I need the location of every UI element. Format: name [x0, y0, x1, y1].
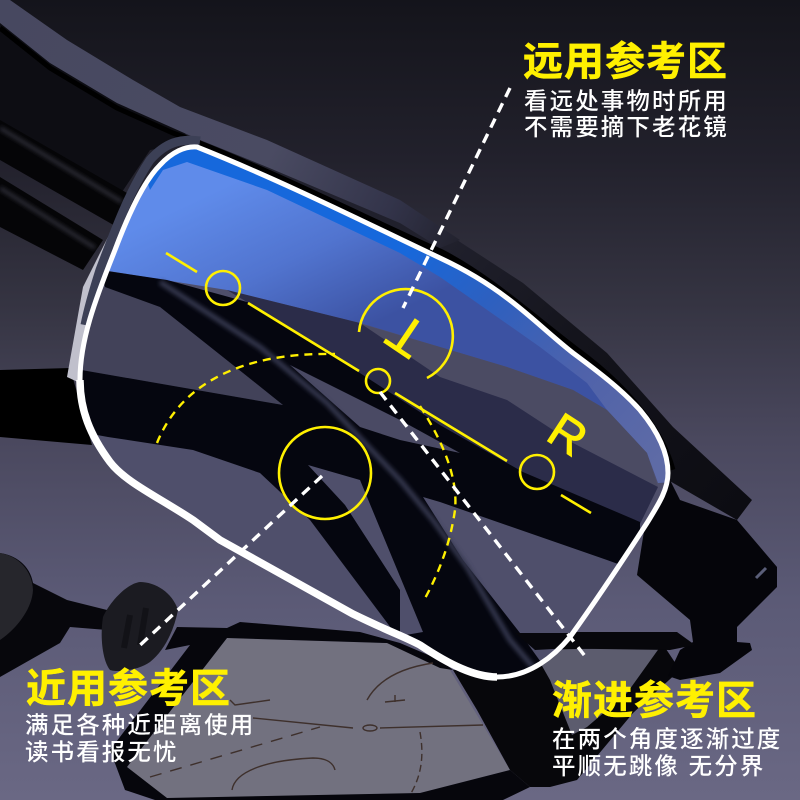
white leader lines [137, 88, 588, 660]
gray lower lens right [533, 647, 660, 735]
heading: far zone: 远用参考区 [523, 40, 728, 84]
lens rim [80, 147, 668, 677]
panel: lower right frame hinge [453, 476, 777, 787]
black arm and dark bands [70, 270, 640, 700]
left nose pad and bridge [0, 553, 107, 677]
near zone circle [279, 427, 371, 519]
blue upper zone [110, 162, 664, 483]
panel: brow strip [0, 0, 460, 248]
text: near zone description [25, 712, 255, 765]
text: progressive zone description: 平顺无跳像 无分界 [552, 753, 765, 779]
panel: lens [82, 149, 666, 670]
text: far zone description [524, 88, 729, 140]
near zone dashed arc [157, 354, 455, 602]
yellow reference axis [166, 253, 591, 513]
panel: dark temple bars [0, 120, 127, 445]
second frame bar through lens [520, 633, 570, 650]
gray zone beneath blue [340, 318, 658, 487]
panel: black upper frame [180, 128, 752, 520]
text: progressive zone description [552, 726, 782, 779]
text: far zone description: 看远处事物时所用 [524, 88, 729, 114]
text: progressive zone description: 在两个角度逐渐过度 [552, 726, 782, 752]
letter R marker: R [538, 404, 596, 467]
panel: dark shade left [0, 23, 200, 210]
heading: near zone: 近用参考区 [26, 667, 231, 711]
lower lens line art [150, 663, 483, 795]
navy band [227, 290, 658, 524]
text: near zone description: 读书看报无忧 [25, 739, 179, 765]
far zone arc [359, 289, 453, 378]
heading: progressive zone: 渐进参考区 [552, 679, 757, 723]
panel: nose bridge piece [67, 140, 200, 383]
letter L marker: T [376, 301, 437, 369]
icon: nose pad [102, 582, 178, 671]
text: near zone description: 满足各种近距离使用 [25, 712, 255, 738]
bright blue edge strip [148, 149, 666, 483]
panel: second lens reflection below [0, 553, 530, 800]
upper left gray field [70, 285, 283, 405]
lower lens frame [110, 622, 530, 800]
text: far zone description: 不需要摘下老花镜 [524, 114, 729, 140]
arm highlight [160, 282, 533, 667]
gray wedges [290, 365, 460, 453]
